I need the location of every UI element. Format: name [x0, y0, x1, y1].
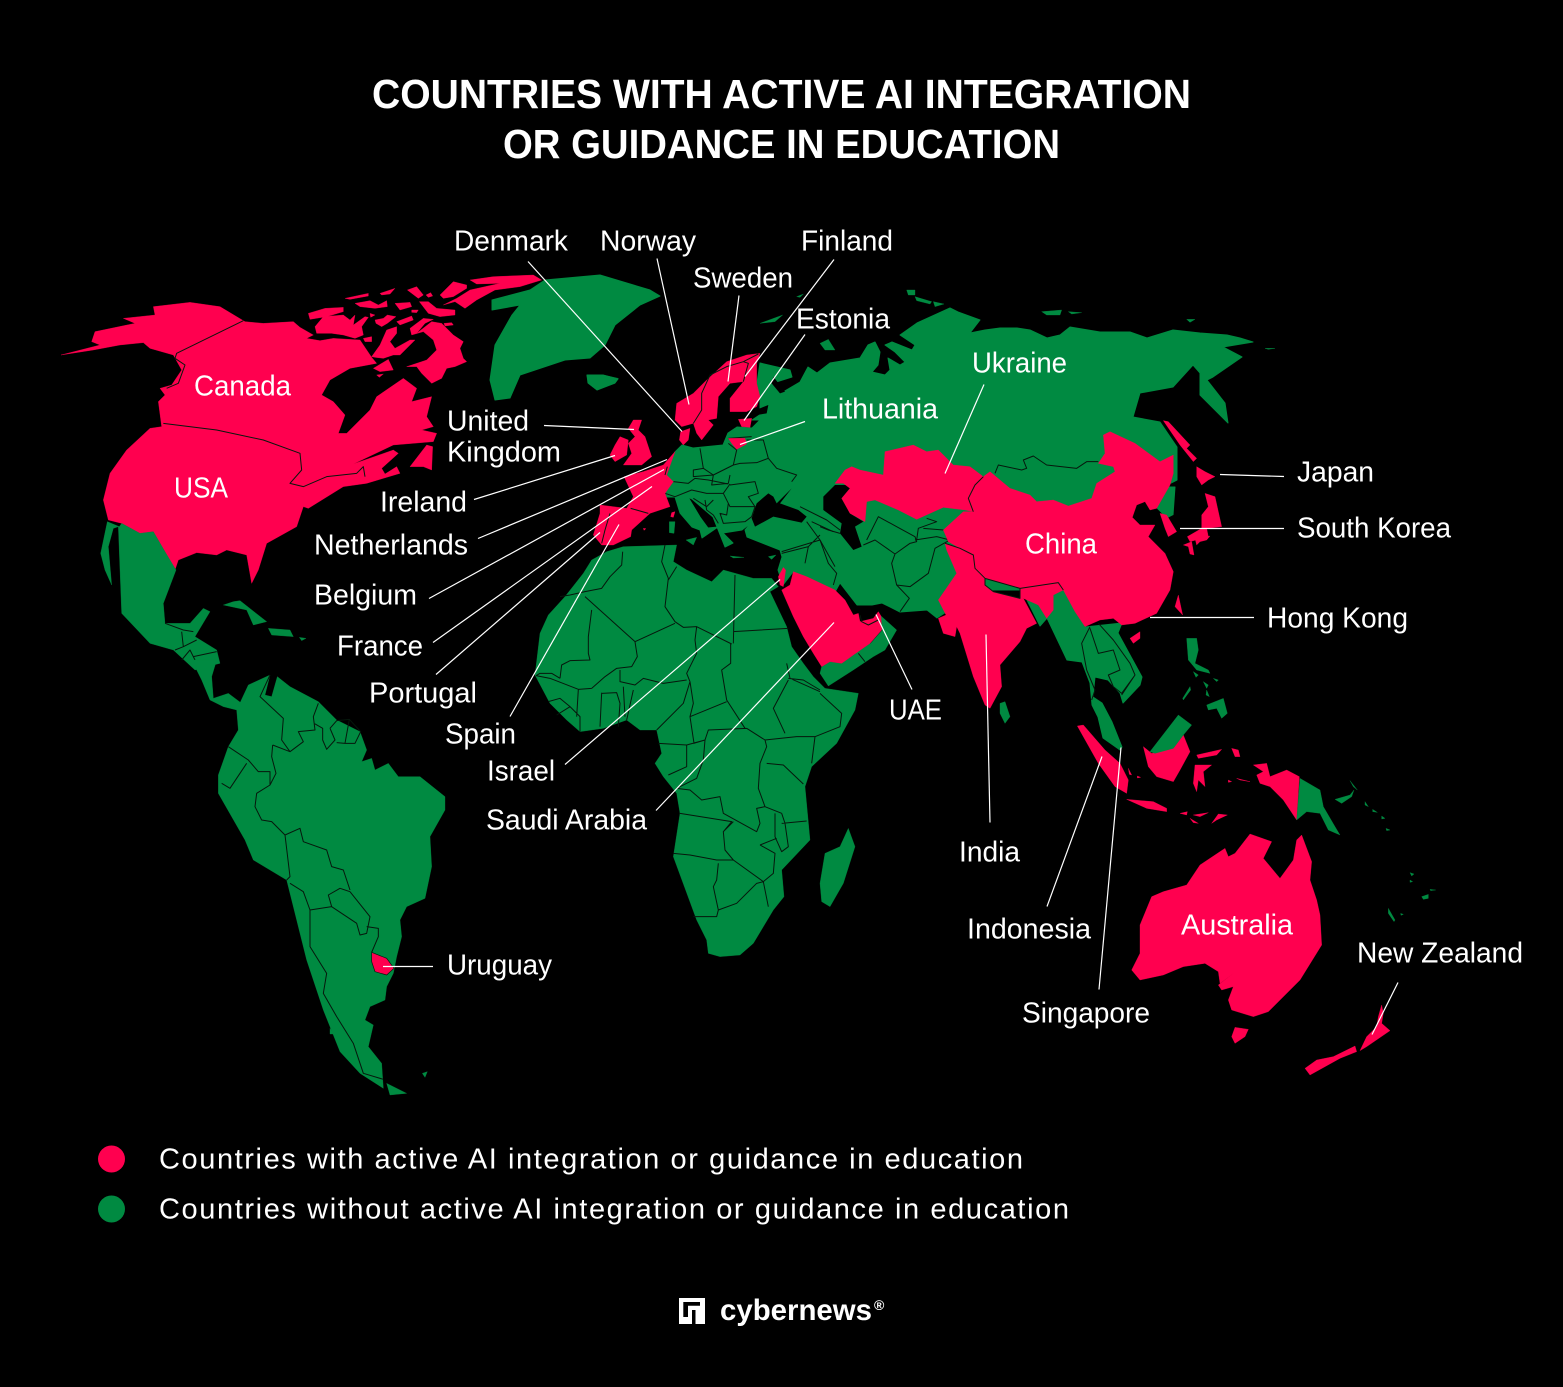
US Canada border [163, 321, 365, 487]
label: Ireland [380, 456, 615, 518]
label: France: France [337, 630, 423, 662]
region: Middle East pink [778, 567, 897, 686]
label: Singapore [1022, 748, 1150, 1030]
label: Ireland: Ireland [380, 486, 467, 518]
label: Netherlands [314, 460, 667, 562]
label: Ukraine: Ukraine [972, 348, 1067, 380]
region: Greenland and Iceland [490, 275, 660, 400]
legend item: without guidance: Countries without active AI integration or guidance in education [159, 1194, 1069, 1226]
region: North America pink [61, 275, 542, 583]
label: New Zealand: New Zealand [1357, 938, 1523, 970]
label: Spain [445, 524, 619, 750]
region: Australia and New Zealand [1132, 834, 1390, 1075]
label: Canada: Canada [194, 370, 292, 402]
label: United Kingdom: Kingdom [447, 436, 561, 468]
borders [222, 675, 383, 1079]
region: Southeast Asia islands [1077, 715, 1436, 922]
Arctic islands [308, 275, 542, 383]
legend [98, 1144, 1069, 1226]
seas [752, 377, 807, 527]
France, Spain and Portugal [593, 452, 675, 545]
Uruguay [372, 952, 394, 975]
Estonia [738, 418, 752, 427]
label: Denmark [454, 226, 682, 432]
label: France [337, 486, 652, 662]
label: UAE [876, 614, 942, 726]
label: United Kingdom: United [447, 406, 529, 438]
label: Uruguay: Uruguay [447, 950, 552, 982]
label: Indonesia [967, 756, 1102, 946]
Yellow Sea [1130, 498, 1187, 563]
title: OR GUIDANCE IN EDUCATION [503, 121, 1060, 167]
label: India [959, 634, 1021, 868]
label: China: China [1025, 528, 1098, 560]
label: Belgium: Belgium [314, 580, 417, 612]
label: Sweden: Sweden [693, 262, 793, 294]
label: Norway: Norway [600, 226, 696, 258]
region: Mexico, Central America and Caribbean [101, 522, 306, 670]
label: Sweden [693, 262, 793, 382]
label: UAE: UAE [889, 694, 942, 726]
label: Netherlands: Netherlands [314, 530, 468, 562]
label: Japan: Japan [1297, 456, 1374, 488]
label: Portugal [369, 532, 600, 710]
label: Lithuania [740, 394, 939, 444]
legend item: with guidance: Countries with active AI integration or guidance in education [159, 1144, 1023, 1176]
label: Norway [600, 226, 696, 404]
label: New Zealand [1357, 938, 1523, 1034]
label: Indonesia: Indonesia [967, 914, 1092, 946]
UK and Ireland [623, 420, 652, 465]
region: Eurasia green [587, 290, 1275, 750]
label: Lithuania: Lithuania [822, 394, 939, 426]
label: Ukraine [945, 348, 1067, 474]
region: Japan, Sakhalin and South Korea [1160, 421, 1222, 555]
icon: cybernews mark [679, 1298, 705, 1324]
Lithuania [728, 438, 747, 449]
label: Denmark: Denmark [454, 226, 568, 258]
region: Africa [535, 545, 858, 957]
Norway, Sweden and Finland [675, 353, 760, 440]
label: Australia: Australia [1181, 910, 1294, 942]
title: COUNTRIES WITH ACTIVE AI INTEGRATION [372, 71, 1191, 117]
label: Israel: Israel [487, 756, 555, 788]
label: Estonia [744, 304, 891, 420]
label: Hong Kong: Hong Kong [1267, 602, 1408, 634]
label: Spain: Spain [445, 718, 516, 750]
logo: cybernews: cybernews [720, 1294, 872, 1327]
label: Portugal: Portugal [369, 678, 477, 710]
world map [61, 275, 1436, 1095]
region: Europe pink [593, 353, 760, 545]
label: Singapore: Singapore [1022, 998, 1150, 1030]
title [372, 71, 1191, 167]
label: South Korea: South Korea [1297, 512, 1452, 544]
label: India: India [959, 836, 1021, 868]
label: Saudi Arabia [486, 622, 834, 836]
logo: cybernews: ® [874, 1297, 885, 1313]
label: Finland: Finland [801, 226, 893, 258]
small islands [760, 290, 1275, 350]
Denmark [679, 428, 690, 445]
label: USA: USA [174, 472, 229, 504]
label: Finland [745, 226, 893, 376]
country labels [174, 226, 1523, 1034]
label: United Kingdom [447, 406, 634, 468]
borders [536, 545, 842, 917]
label: Israel [487, 580, 780, 788]
borders [665, 437, 840, 567]
region: South America [192, 660, 445, 1095]
label: Saudi Arabia: Saudi Arabia [486, 804, 648, 836]
region: Kazakhstan, China, India and Sri Lanka [835, 432, 1227, 723]
label: Belgium [314, 470, 664, 612]
label: Estonia: Estonia [796, 304, 891, 336]
